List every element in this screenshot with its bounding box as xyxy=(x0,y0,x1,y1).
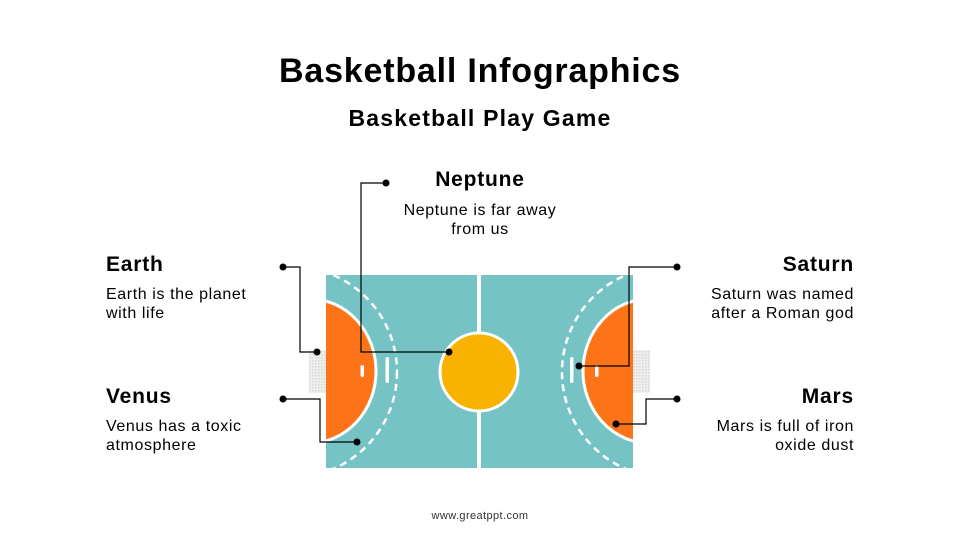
Saturn text xyxy=(711,253,854,322)
Mars text: Mars xyxy=(802,385,854,408)
Earth text: Earth is the planet xyxy=(106,286,246,303)
leader lines xyxy=(283,183,677,442)
Mars text xyxy=(717,385,854,454)
Mars text: Mars is full of iron xyxy=(717,418,854,435)
court diagram xyxy=(280,180,680,468)
Saturn text: Saturn was named xyxy=(711,286,854,303)
Venus text: atmosphere xyxy=(106,437,196,454)
title: Basketball Infographics xyxy=(279,52,681,90)
Venus text: Venus has a toxic xyxy=(106,418,242,435)
Saturn text: Saturn xyxy=(783,253,854,276)
Neptune text xyxy=(404,168,556,238)
Earth text xyxy=(106,253,246,322)
Saturn text: after a Roman god xyxy=(711,305,854,322)
Neptune text: Neptune is far away xyxy=(404,202,556,219)
Venus text: Venus xyxy=(106,385,172,408)
footer: www.greatppt.com xyxy=(432,510,528,522)
Neptune text: Neptune xyxy=(435,168,525,191)
Earth text: Earth xyxy=(106,253,164,276)
Earth text: with life xyxy=(106,305,165,322)
Mars text: oxide dust xyxy=(775,437,854,454)
subtitle: Basketball Play Game xyxy=(348,105,612,131)
Venus text xyxy=(106,385,242,454)
Neptune text: from us xyxy=(451,221,509,238)
